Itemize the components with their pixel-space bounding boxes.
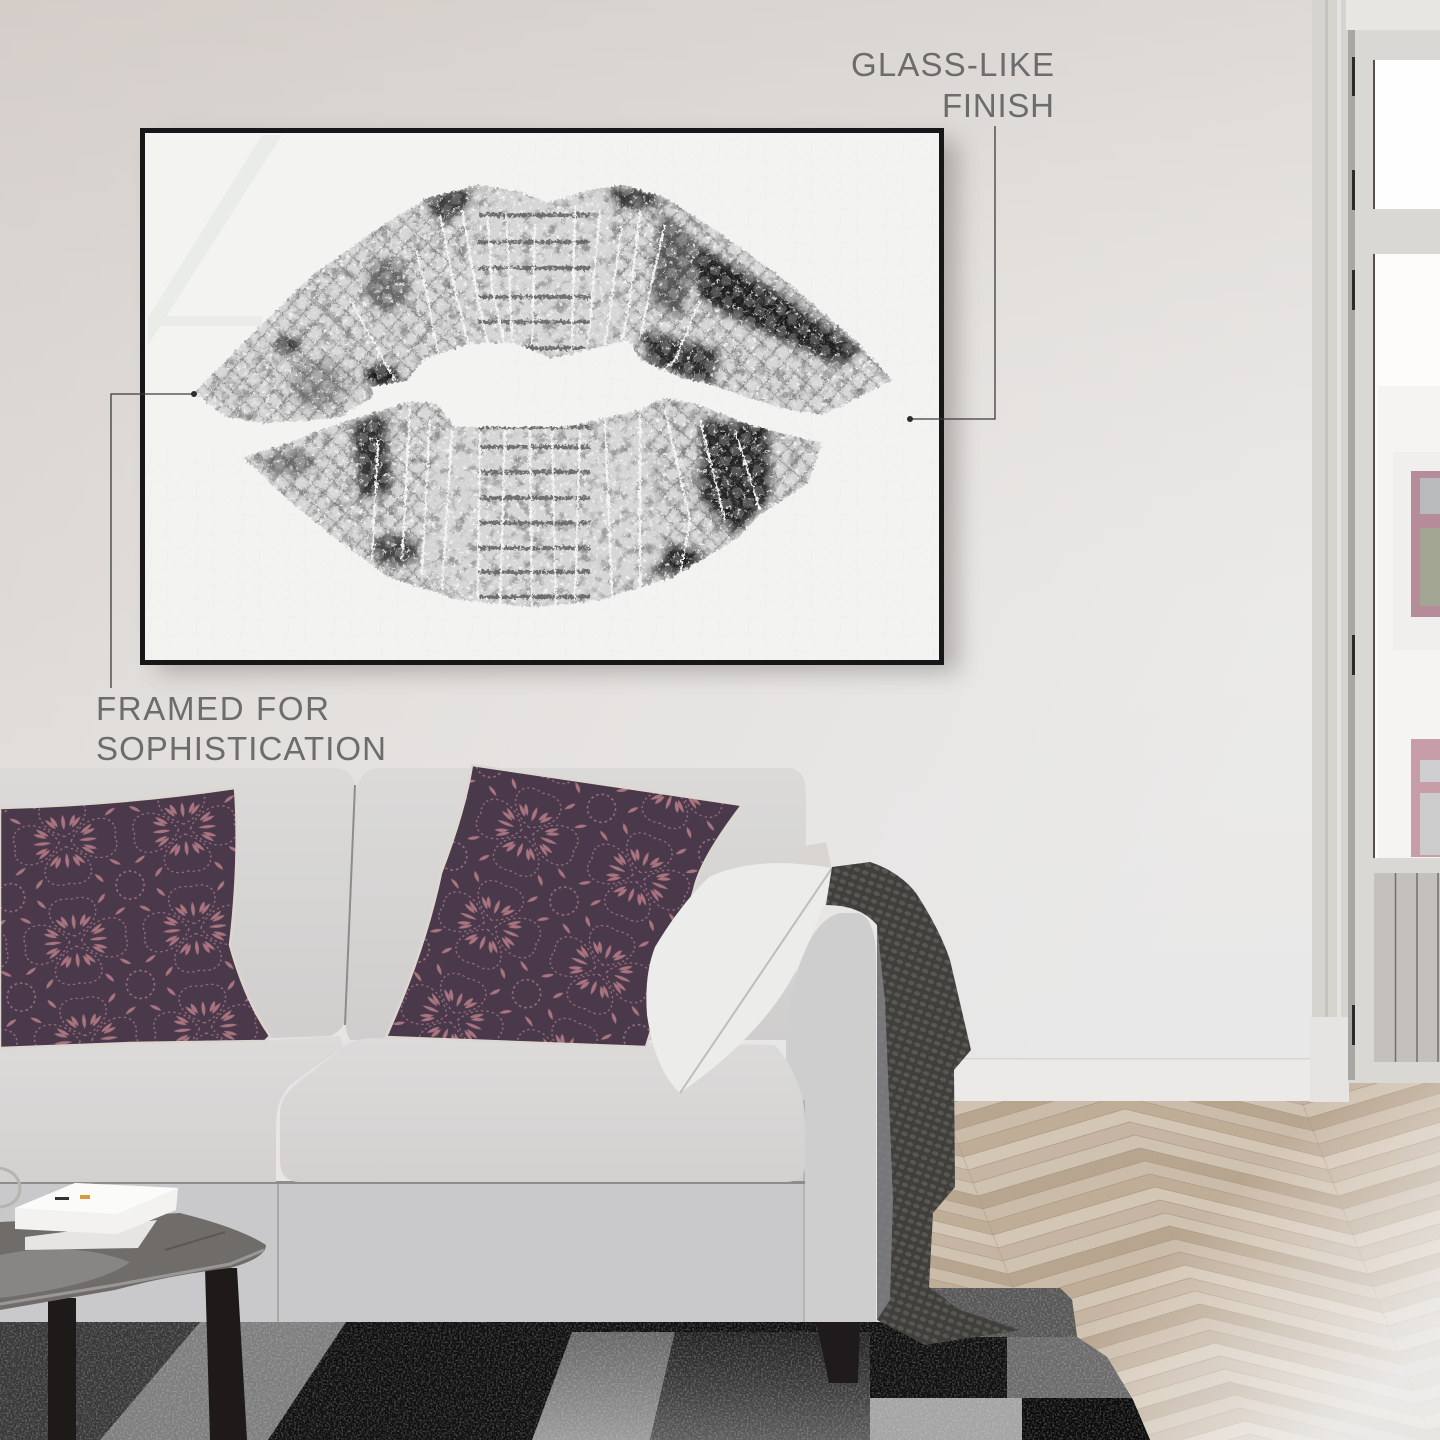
sofa leg [816, 1322, 860, 1383]
baseboard [950, 1058, 1312, 1101]
rug pile texture [0, 1285, 1160, 1440]
wooden door panel [1374, 873, 1440, 1062]
seat cushion right [280, 1038, 805, 1182]
black frame [142, 130, 942, 662]
hinges [1352, 57, 1355, 1045]
label: framed for sophistication: SOPHISTICATION [96, 730, 386, 767]
white speckle noise [190, 175, 900, 610]
door casing [1310, 0, 1349, 1102]
lips artwork [190, 175, 900, 610]
knitted throw [826, 862, 1020, 1345]
scale lattice [190, 175, 900, 610]
coffee table [0, 1168, 266, 1440]
callout line: glass-like finish [907, 126, 995, 422]
central ribbed stripes [420, 190, 665, 604]
window pane: lower with building view [1374, 254, 1440, 858]
sofa base [0, 1183, 803, 1322]
glass reflection [148, 135, 282, 345]
wall background [0, 0, 1440, 1100]
back cushion left [0, 768, 356, 1048]
seat cushion left [0, 1036, 343, 1182]
white pillow [646, 842, 832, 1093]
marble table top [0, 1213, 266, 1310]
sofa [0, 765, 1020, 1383]
table legs [48, 1268, 247, 1440]
label: framed for sophistication: FRAMED FOR [96, 690, 329, 727]
dark blotches [264, 186, 862, 574]
purple pillow centre [386, 765, 742, 1047]
framed artwork [142, 130, 958, 672]
back cushion right [346, 768, 806, 1040]
crease between cushions [345, 785, 355, 1025]
leather texture [500, 134, 938, 660]
sofa arm [786, 913, 876, 1322]
label: glass-like finish: GLASS-LIKE [851, 46, 1054, 83]
patterned rug [0, 1285, 1160, 1440]
wooden herringbone floor [900, 1083, 1440, 1440]
label: glass-like finish [851, 46, 1054, 124]
frame shadow [158, 140, 958, 672]
window pane: upper [1374, 60, 1440, 209]
window and door trim [1310, 0, 1440, 1102]
mottled noise [190, 175, 900, 610]
callout line: framed for sophistication [111, 391, 197, 688]
stacked books [15, 1183, 178, 1250]
label: glass-like finish: FINISH [942, 87, 1054, 124]
purple pillow left [0, 788, 270, 1048]
label: framed for sophistication [96, 690, 386, 767]
white paint drips [350, 205, 760, 608]
glass ornament [0, 1168, 20, 1207]
